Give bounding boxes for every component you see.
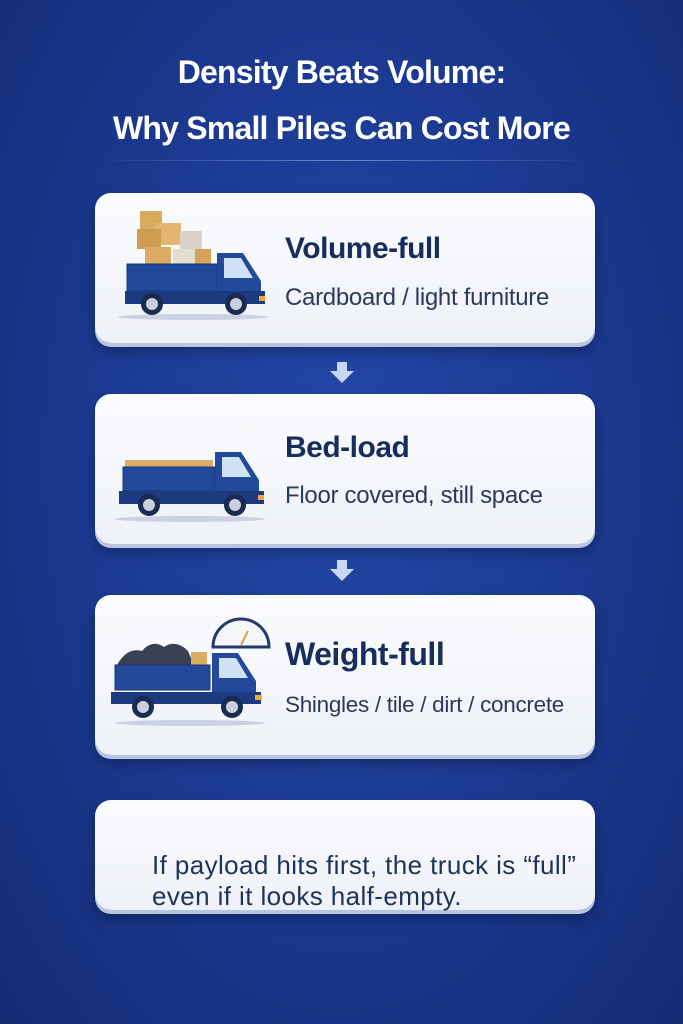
arrow (330, 362, 354, 383)
panel: volume-full (95, 193, 595, 343)
subtext: Floor covered, still space (285, 482, 543, 509)
heading: Bed-load (285, 431, 409, 464)
callout text (152, 850, 576, 911)
title: Density Beats Volume: (178, 54, 505, 90)
heading: Volume-full (285, 232, 441, 265)
title (113, 54, 570, 146)
panel: weight-full (95, 595, 595, 755)
icon: truck with flat load (115, 452, 265, 522)
title: Why Small Piles Can Cost More (113, 110, 570, 146)
icon: truck with rubble and gauge (111, 618, 270, 726)
callout text: If payload hits first, the truck is “full” (152, 850, 576, 880)
subtext: Shingles / tile / dirt / concrete (285, 692, 564, 717)
icon: truck with boxes (118, 211, 268, 320)
panel: bed-load (95, 394, 595, 544)
callout text: even if it looks half-empty. (152, 881, 462, 911)
arrow (330, 560, 354, 581)
subtext: Cardboard / light furniture (285, 284, 549, 311)
callout (95, 800, 595, 910)
heading: Weight-full (285, 636, 444, 672)
